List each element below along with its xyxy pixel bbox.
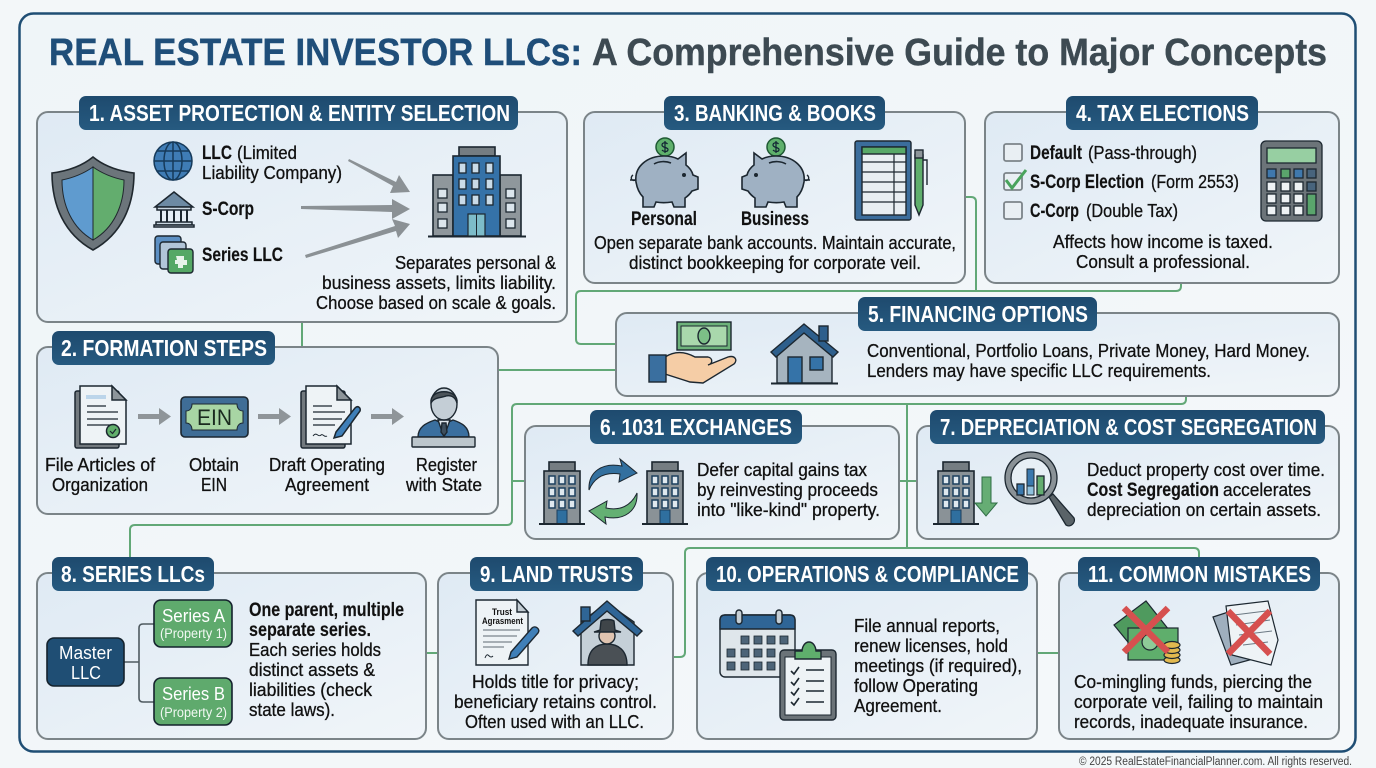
entity labels: S-Corp <box>202 199 254 220</box>
panel 10 description <box>854 615 1022 716</box>
arrows to building <box>301 159 410 258</box>
icon: down arrow <box>975 477 997 516</box>
step labels: Draft Operating <box>269 454 385 475</box>
panel 7 heading <box>930 410 1325 444</box>
icon: building <box>933 462 979 524</box>
election options: (Pass-through) <box>1088 142 1197 163</box>
panel 9 box <box>438 573 673 739</box>
panel 3 labels <box>631 209 809 230</box>
icon: trust agreement: Trust <box>492 607 512 617</box>
icon: second building <box>642 462 688 524</box>
icon: first building <box>539 462 585 524</box>
icon: personal piggy bank <box>630 138 698 207</box>
step labels: Organization <box>52 474 148 495</box>
panel 1 description <box>316 252 557 313</box>
step labels: File Articles of <box>45 454 156 475</box>
entity labels <box>202 142 342 266</box>
panel 10 description: renew licenses, hold <box>854 635 1008 656</box>
panel 8 box <box>37 573 426 739</box>
master LLC box: Master <box>59 642 112 663</box>
icon: EIN certificate: EIN <box>197 405 232 430</box>
panel 8: series LLCs <box>37 557 426 739</box>
master LLC box: LLC <box>71 662 101 683</box>
election options: C-Corp <box>1030 201 1079 222</box>
master LLC box <box>47 638 124 686</box>
icon: house with hidden figure <box>573 601 642 665</box>
panel 6 box <box>525 426 899 539</box>
entity labels: Series LLC <box>202 245 283 266</box>
panel 5 box <box>616 313 1339 396</box>
connector lines <box>130 197 1199 657</box>
panel 3 description: Open separate bank accounts. Maintain accurate, <box>594 232 956 253</box>
panel 8 description <box>249 600 404 720</box>
panel 4 box <box>985 112 1339 283</box>
panel 1 description: business assets, limits liability. <box>322 272 556 293</box>
step labels: Obtain <box>189 454 239 475</box>
panel 11 heading <box>1078 557 1320 591</box>
panel 9: land trusts <box>438 557 673 739</box>
panel 8 description: distinct assets & <box>249 659 376 680</box>
panel 1 box <box>37 112 567 322</box>
election options <box>1030 142 1239 222</box>
icon: crossed-out money <box>1114 601 1180 664</box>
title <box>49 32 1327 74</box>
panel 2 heading <box>52 331 275 365</box>
panel 9 heading <box>470 557 643 591</box>
icon: articles document <box>75 386 126 448</box>
icon: trust agreement: Agrasment <box>482 616 523 626</box>
panel 10 heading: 10. OPERATIONS & COMPLIANCE <box>716 561 1019 587</box>
icon: exchange arrows <box>589 459 637 524</box>
series A box: (Property 1) <box>160 626 227 641</box>
panel 11 description: Co-mingling funds, piercing the <box>1074 671 1312 692</box>
panel 7 box <box>917 426 1339 539</box>
panel 7 description: Cost Segregation <box>1087 480 1219 501</box>
panel 11 heading: 11. COMMON MISTAKES <box>1088 561 1311 587</box>
icon: clipboard checklist <box>780 642 836 720</box>
panel 6: 1031 exchanges <box>525 410 899 539</box>
panel 8 description: state laws). <box>249 699 335 720</box>
icon: registrar person <box>412 388 475 447</box>
icon: ledger and pen <box>855 141 927 220</box>
panel 10 description: follow Operating <box>854 675 978 696</box>
icon: trust agreement <box>476 600 539 665</box>
panel 1: asset protection and entity selection <box>37 96 567 322</box>
panel 3 heading: 3. BANKING & BOOKS <box>674 100 876 126</box>
panel 10: operations and compliance <box>697 557 1037 739</box>
election options: Default <box>1030 143 1083 164</box>
panel 8 heading <box>52 557 214 591</box>
icon: stacked series <box>155 236 193 273</box>
org chart connectors <box>124 624 154 702</box>
panel 10 description: meetings (if required), <box>854 655 1022 676</box>
panel 8 description: Each series holds <box>249 639 381 660</box>
icon: operating agreement with pen <box>301 386 360 448</box>
panel 6 description: Defer capital gains tax <box>697 459 868 480</box>
panel 3 heading <box>664 96 885 130</box>
panel 3 box <box>584 112 965 283</box>
panel 4 heading <box>1066 96 1258 130</box>
panel 9 description: Holds title for privacy; <box>472 671 639 692</box>
step labels: Agreement <box>285 474 369 495</box>
panel 10 description: Agreement. <box>854 695 942 716</box>
entity labels: LLC <box>202 143 232 164</box>
icon: globe <box>154 142 192 180</box>
panel 6 description: by reinvesting proceeds <box>697 479 878 500</box>
title: REAL ESTATE INVESTOR LLCs: <box>49 32 582 74</box>
icon: business piggy bank <box>742 138 810 207</box>
panel 8 heading: 8. SERIES LLCs <box>61 561 205 587</box>
panel 10 heading <box>706 557 1028 591</box>
panel 5 heading <box>858 297 1097 331</box>
step labels <box>45 454 482 495</box>
panel 9 description: beneficiary retains control. <box>454 691 657 712</box>
panel 3 labels: Personal <box>631 209 697 230</box>
icon: office building <box>428 147 526 236</box>
panel 8 description: liabilities (check <box>249 679 373 700</box>
panel 6 description: into "like-kind" property. <box>697 499 880 520</box>
series B box: Series B <box>162 683 225 704</box>
panel 6 heading: 6. 1031 EXCHANGES <box>600 414 792 440</box>
arrow <box>371 408 404 425</box>
panel 1 description: Separates personal & <box>395 252 557 273</box>
panel 3 description <box>594 232 956 273</box>
panel 11 description <box>1074 671 1323 732</box>
series B box <box>154 678 232 725</box>
checkboxes <box>1004 144 1026 219</box>
series A box <box>154 600 232 647</box>
icon: EIN certificate <box>181 397 248 437</box>
panel 11: common mistakes <box>1059 557 1339 739</box>
panel 1 heading: 1. ASSET PROTECTION & ENTITY SELECTION <box>89 100 510 126</box>
panel 6 heading <box>590 410 802 444</box>
panel 4 description: Consult a professional. <box>1076 251 1250 272</box>
icon: house <box>771 324 838 384</box>
panel 11 description: corporate veil, failing to maintain <box>1074 691 1323 712</box>
arrow <box>138 408 171 425</box>
panel 5 description <box>867 340 1310 381</box>
panel 7 description <box>1087 459 1325 520</box>
step labels: Register <box>416 454 477 475</box>
panel 7 description: depreciation on certain assets. <box>1087 499 1321 520</box>
icon: calculator <box>1261 141 1322 221</box>
step labels: with State <box>405 474 482 495</box>
panel 5: financing options <box>616 297 1339 396</box>
step labels: EIN <box>201 474 227 495</box>
panel 2: formation steps <box>37 331 498 514</box>
panel 2 box <box>37 347 498 514</box>
arrow <box>258 408 291 425</box>
panel 5 description: Conventional, Portfolio Loans, Private Money, Hard Money. <box>867 340 1310 361</box>
panel 4 description <box>1053 231 1273 272</box>
panel 9 description <box>454 671 657 732</box>
panel 8 description: separate series. <box>249 620 371 641</box>
icon: bank <box>154 192 194 227</box>
icon: magnifier chart <box>1005 452 1074 526</box>
panel 7 description: accelerates <box>1223 479 1311 500</box>
entity labels: Liability Company) <box>202 162 342 183</box>
icon: calendar <box>720 610 795 677</box>
series A box: Series A <box>162 605 226 626</box>
panel 1 description: Choose based on scale & goals. <box>316 292 556 313</box>
panel 1 heading <box>79 96 518 130</box>
icon: crossed-out documents <box>1213 601 1278 665</box>
icon: shield <box>52 157 134 250</box>
panel 10 description: File annual reports, <box>854 615 1000 636</box>
panel 5 description: Lenders may have specific LLC requirements. <box>867 360 1211 381</box>
panel 2 heading: 2. FORMATION STEPS <box>61 335 267 361</box>
panel 3 description: distinct bookkeeping for corporate veil. <box>629 252 921 273</box>
panel 5 heading: 5. FINANCING OPTIONS <box>868 301 1088 327</box>
panel 9 description: Often used with an LLC. <box>465 711 644 732</box>
election options: (Form 2553) <box>1151 171 1239 192</box>
icon: cash in hand <box>649 322 736 383</box>
election options: S-Corp Election <box>1030 172 1144 193</box>
panel 11 box <box>1059 573 1339 739</box>
panel 3: banking and books <box>584 96 965 283</box>
panel 6 description <box>697 459 880 520</box>
series B box: (Property 2) <box>160 705 227 720</box>
panel 10 box <box>697 573 1037 739</box>
panel 4: tax elections <box>985 96 1339 283</box>
panel 3 labels: Business <box>741 209 809 230</box>
election options: (Double Tax) <box>1086 200 1178 221</box>
panel 7 description: Deduct property cost over time. <box>1087 459 1325 480</box>
entity labels: (Limited <box>237 142 297 163</box>
panel 8 description: One parent, multiple <box>249 600 404 621</box>
panel 11 description: records, inadequate insurance. <box>1074 711 1308 732</box>
title: A Comprehensive Guide to Major Concepts <box>592 32 1327 74</box>
panel 7: depreciation and cost segregation <box>917 410 1339 539</box>
panel 9 heading: 9. LAND TRUSTS <box>480 561 633 587</box>
panel 4 description: Affects how income is taxed. <box>1053 231 1273 252</box>
panel 4 heading: 4. TAX ELECTIONS <box>1076 100 1249 126</box>
